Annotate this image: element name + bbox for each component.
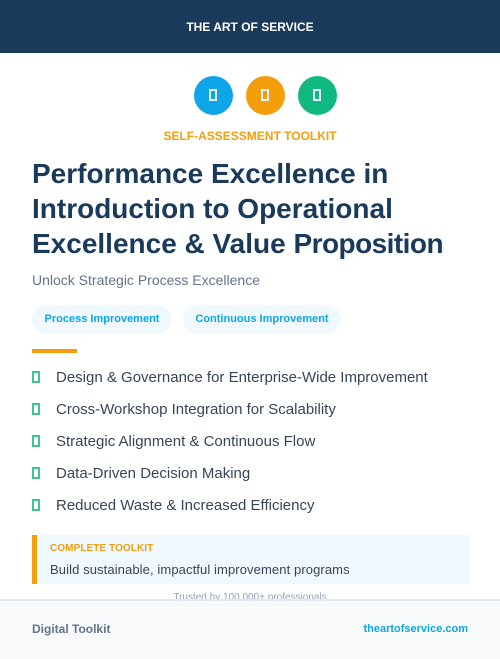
callout text: Build sustainable, impactful improvement programs xyxy=(50,562,350,577)
list item 3: Strategic Alignment & Continuous Flow xyxy=(56,433,315,450)
main title xyxy=(32,158,443,259)
main title: Excellence & Value Proposition xyxy=(32,228,443,259)
icon: blue circle xyxy=(194,76,233,115)
footer left label: Digital Toolkit xyxy=(32,622,110,636)
footer url: theartofservice.com xyxy=(363,623,468,635)
pill: process improvement: Process Improvement xyxy=(45,313,159,325)
header banner: THE ART OF SERVICE xyxy=(186,20,314,34)
callout: complete toolkit xyxy=(32,535,469,584)
icon: orange circle xyxy=(246,76,285,115)
list item 5: Reduced Waste & Increased Efficiency xyxy=(56,497,314,514)
benefits list xyxy=(32,369,428,514)
pill: continuous improvement xyxy=(183,305,341,334)
list item 2: Cross-Workshop Integration for Scalability xyxy=(56,401,336,418)
main title: Introduction to Operational xyxy=(32,193,393,224)
main title: Performance Excellence in xyxy=(32,158,388,189)
list item 1: Design & Governance for Enterprise-Wide Improvement xyxy=(56,369,428,386)
pill: process improvement xyxy=(32,305,172,334)
pill: continuous improvement: Continuous Improvement xyxy=(195,313,329,325)
eyebrow label: SELF-ASSESSMENT TOOLKIT xyxy=(163,129,337,143)
list item 4: Data-Driven Decision Making xyxy=(56,465,250,482)
header banner xyxy=(0,0,500,53)
icon: green circle xyxy=(298,76,337,115)
accent rule xyxy=(32,349,77,353)
trust note: Trusted by 100,000+ professionals xyxy=(173,592,327,603)
tag pills xyxy=(32,305,341,334)
subtitle: Unlock Strategic Process Excellence xyxy=(32,272,260,288)
icon row xyxy=(194,76,337,115)
footer xyxy=(0,599,500,659)
callout label: COMPLETE TOOLKIT xyxy=(50,543,153,554)
